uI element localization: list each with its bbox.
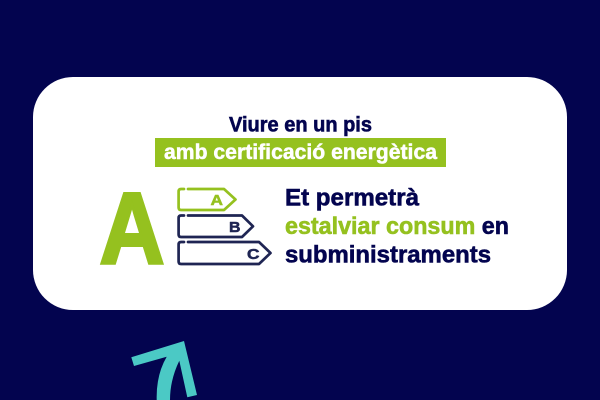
- large energy rating letter A: A: [100, 174, 164, 286]
- icon: label A: A: [210, 193, 224, 209]
- heading line: Viure en un pis: Viure en un pis: [229, 112, 372, 136]
- text block: savings message: estalviar consum en: [285, 213, 509, 240]
- arrow: teal upward arrow: [131, 341, 197, 400]
- icon: energy rating labels: [179, 189, 270, 264]
- icon: label C: C: [247, 247, 260, 263]
- panel: white card: [33, 77, 567, 310]
- heading highlight: amb certificació energètica: amb certificació energètica: [164, 141, 437, 164]
- text block: savings message: subministraments: [285, 242, 491, 268]
- icon: label B: B: [229, 220, 240, 236]
- text block: savings message: [285, 184, 509, 268]
- text block: savings message: Et permetrà: [285, 184, 419, 212]
